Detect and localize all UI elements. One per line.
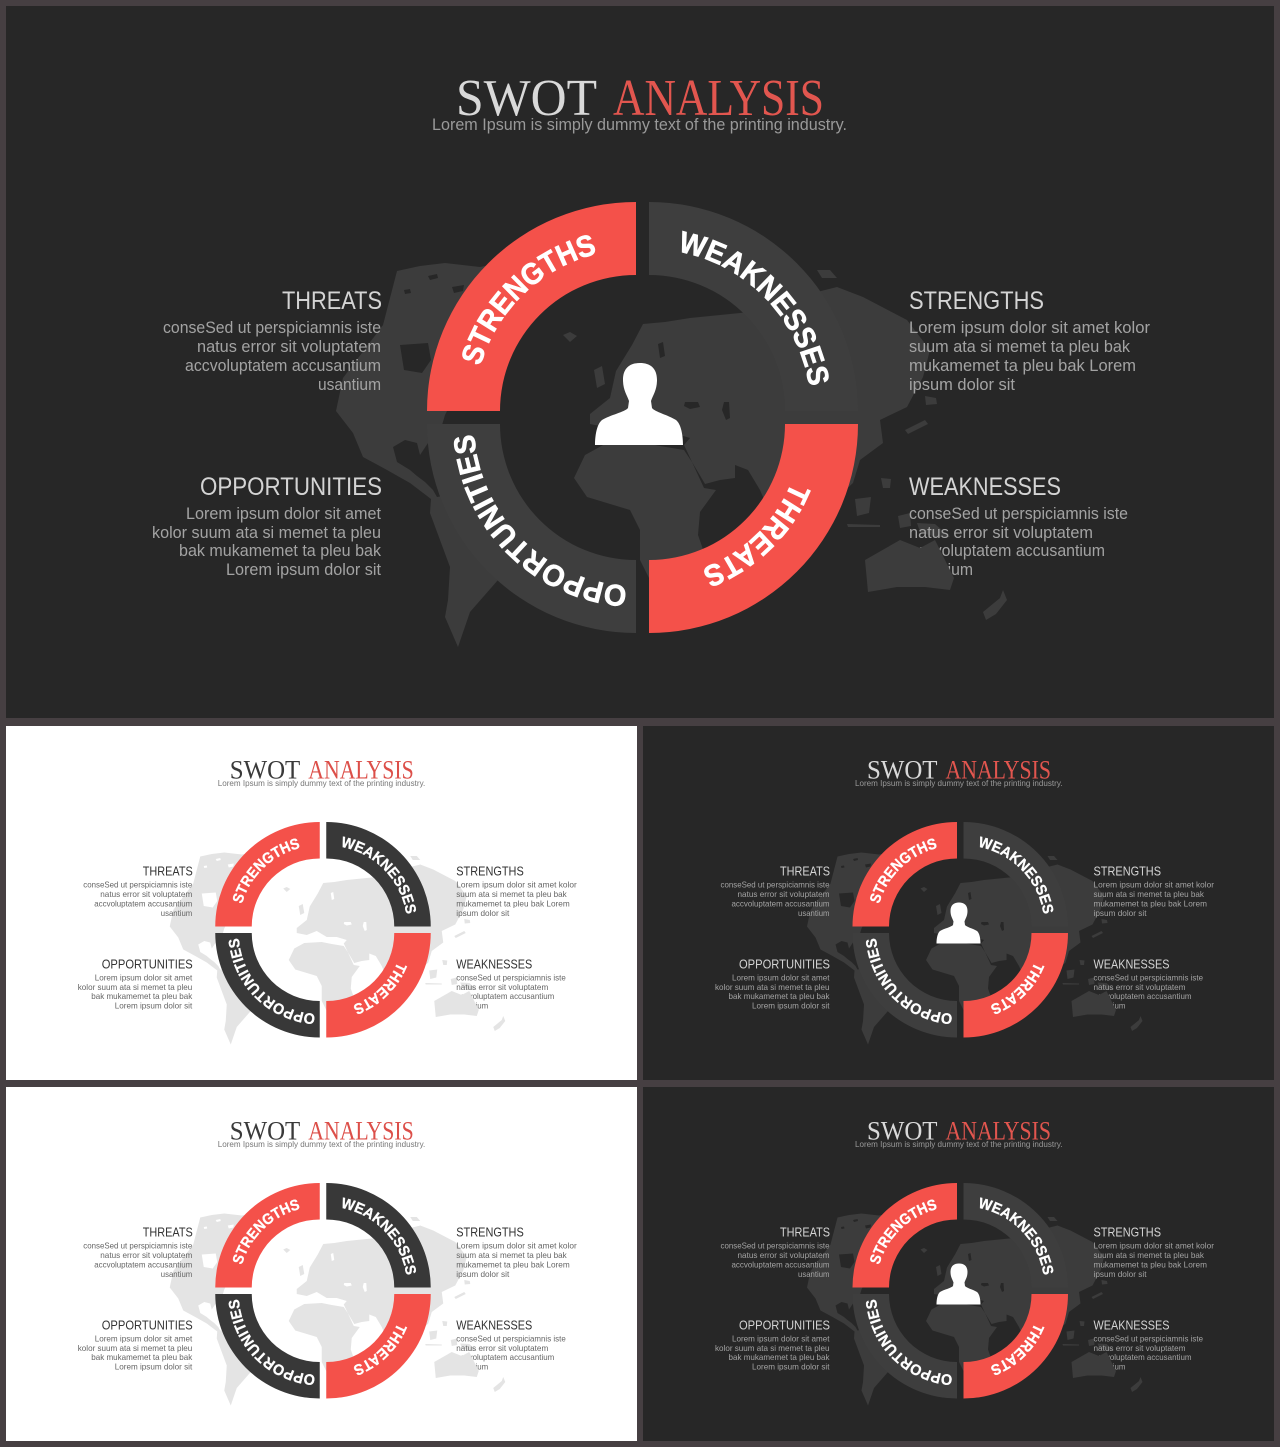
ring segment: opportunities: OPPORTUNITIES [866, 1300, 952, 1385]
text block: strengths: mukamemet ta pleu bak Lorem [1094, 900, 1207, 908]
text block: threats: accvoluptatem accusantium [732, 900, 830, 908]
text block: threats: usantium [798, 1270, 830, 1279]
icon: person [936, 1264, 980, 1304]
slide content [715, 1116, 1214, 1405]
text block: opportunities: kolor suum ata si memet ta pleu [715, 983, 830, 992]
ring segment: threats: THREATS [354, 964, 408, 1014]
subtitle: Lorem Ipsum is simply dummy text of the printing industry. [855, 1139, 1062, 1149]
panel: dark slide bottom [643, 1087, 1274, 1441]
title [456, 70, 824, 127]
text block: strengths: STRENGTHS [909, 287, 1044, 315]
text block: threats: usantium [161, 909, 192, 918]
text block: weaknesses: conseSed ut perspiciamnis iste [1094, 1334, 1203, 1344]
ring segment: weaknesses: WEAKNESSES [682, 230, 829, 385]
text block: threats: natus error sit voluptatem [197, 338, 381, 356]
text block: strengths: Lorem ipsum dolor sit amet kolor [456, 880, 577, 890]
text block: threats: conseSed ut perspiciamnis iste [720, 880, 830, 890]
text block: opportunities: bak mukamemet ta pleu bak [91, 992, 193, 1001]
text block: opportunities: bak mukamemet ta pleu bak [179, 542, 382, 560]
text block: weaknesses: conseSed ut perspiciamnis iste [1094, 974, 1203, 982]
text block: strengths: ipsum dolor sit [456, 909, 510, 918]
panel background [6, 1087, 637, 1441]
panel: light slide top [6, 726, 637, 1080]
text block: strengths: suum ata si memet ta pleu bak [1094, 1251, 1205, 1260]
text block: weaknesses: WEAKNESSES [1094, 1318, 1170, 1332]
subtitle: Lorem Ipsum is simply dummy text of the printing industry. [855, 778, 1062, 788]
text block: weaknesses [456, 958, 566, 1010]
text block: threats: usantium [798, 909, 830, 918]
text block: weaknesses: natus error sit voluptatem [456, 1344, 548, 1353]
text block: strengths: suum ata si memet ta pleu bak [456, 1251, 568, 1260]
text block: weaknesses: usantium [1094, 1362, 1126, 1372]
text block: opportunities: Lorem ipsum dolor sit [752, 1362, 830, 1372]
icon: person [595, 363, 683, 445]
text block: weaknesses: conseSed ut perspiciamnis iste [456, 1334, 566, 1344]
text block: opportunities: Lorem ipsum dolor sit amet [732, 974, 830, 982]
text block: opportunities: Lorem ipsum dolor sit amet [732, 1334, 830, 1344]
text block: opportunities: kolor suum ata si memet ta pleu [78, 983, 193, 992]
text block: strengths: STRENGTHS [456, 1226, 524, 1240]
text block: threats: accvoluptatem accusantium [732, 1260, 830, 1270]
text block: weaknesses [456, 1318, 566, 1372]
text block: opportunities: OPPORTUNITIES [739, 1318, 830, 1332]
text block: strengths [1094, 864, 1214, 918]
subtitle: Lorem Ipsum is simply dummy text of the printing industry. [218, 778, 425, 788]
text block: strengths: suum ata si memet ta pleu bak [456, 890, 568, 899]
text block: strengths: Lorem ipsum dolor sit amet kolor [456, 1242, 577, 1250]
text block: weaknesses [1094, 958, 1203, 1010]
ring segment: weaknesses: WEAKNESSES [342, 1197, 416, 1275]
panel: main dark slide [6, 6, 1274, 718]
text block: opportunities: Lorem ipsum dolor sit [115, 1002, 193, 1010]
panel background [643, 726, 1274, 1080]
text block: opportunities: Lorem ipsum dolor sit [226, 561, 381, 579]
ring segment: threats [326, 933, 431, 1038]
text block: weaknesses: accvoluptatem accusantium [456, 1353, 554, 1362]
text block: opportunities [715, 958, 830, 1010]
ring segment: threats: THREATS [991, 964, 1044, 1014]
text block: opportunities: bak mukamemet ta pleu bak [91, 1353, 193, 1362]
text block: strengths: STRENGTHS [456, 864, 524, 878]
panel background [643, 1087, 1274, 1441]
text block: opportunities: Lorem ipsum dolor sit [115, 1362, 193, 1372]
text block: threats: accvoluptatem accusantium [94, 1260, 192, 1270]
text block: strengths: ipsum dolor sit [1094, 1270, 1147, 1279]
text block: weaknesses [1094, 1318, 1203, 1372]
text block: threats: THREATS [143, 1226, 193, 1240]
ring segment: strengths [852, 1183, 957, 1288]
ring segment: opportunities: OPPORTUNITIES [228, 1300, 314, 1385]
ring segment: strengths [852, 822, 957, 926]
text block: strengths: mukamemet ta pleu bak Lorem [456, 900, 570, 908]
panel: light slide bottom [6, 1087, 637, 1441]
text block: strengths: mukamemet ta pleu bak Lorem [1094, 1260, 1207, 1270]
text block: strengths [1094, 1226, 1214, 1279]
ring segment: weaknesses: WEAKNESSES [342, 836, 416, 914]
text block: opportunities: Lorem ipsum dolor sit amet [95, 1334, 193, 1344]
text block: strengths: Lorem ipsum dolor sit amet kolor [1094, 880, 1214, 890]
ring segment: strengths: STRENGTHS [870, 1200, 937, 1264]
ring segment: strengths [215, 1183, 320, 1288]
text block: opportunities: Lorem ipsum dolor sit amet [95, 974, 193, 982]
text block: strengths [456, 864, 577, 918]
subtitle: Lorem Ipsum is simply dummy text of the printing industry. [432, 115, 847, 134]
ring segment: weaknesses [326, 1183, 431, 1288]
text block: opportunities [152, 473, 382, 579]
subtitle: Lorem Ipsum is simply dummy text of the printing industry. [218, 1139, 425, 1149]
text block: weaknesses: usantium [456, 1002, 488, 1010]
text block: opportunities [715, 1318, 830, 1372]
text block: opportunities: OPPORTUNITIES [102, 958, 193, 972]
ring segment: weaknesses: WEAKNESSES [980, 1197, 1054, 1275]
title: ANALYSIS [946, 1116, 1051, 1146]
world map [170, 1213, 505, 1406]
text block: strengths: ipsum dolor sit [909, 376, 1015, 394]
map: australia [1072, 991, 1116, 1017]
text block: strengths: mukamemet ta pleu bak Lorem [456, 1260, 570, 1270]
ring segment: threats [964, 1294, 1068, 1398]
text block: opportunities: Lorem ipsum dolor sit amet [186, 505, 381, 523]
title: ANALYSIS [613, 70, 824, 127]
title: ANALYSIS [308, 1116, 414, 1146]
ring segment: strengths: STRENGTHS [870, 838, 937, 903]
text block: strengths: ipsum dolor sit [456, 1270, 510, 1279]
text block: threats: conseSed ut perspiciamnis iste [83, 880, 193, 890]
text block: weaknesses: usantium [909, 561, 973, 579]
text block: opportunities: OPPORTUNITIES [102, 1318, 193, 1332]
text block: threats: THREATS [282, 287, 382, 315]
ring segment: opportunities: OPPORTUNITIES [866, 938, 952, 1024]
map: australia [865, 540, 954, 592]
text block: strengths: Lorem ipsum dolor sit amet kolor [1094, 1242, 1214, 1250]
map: australia [1072, 1352, 1116, 1378]
text block: opportunities: bak mukamemet ta pleu bak [728, 992, 830, 1001]
world map [170, 852, 505, 1044]
ring segment: opportunities: OPPORTUNITIES [228, 938, 314, 1024]
text block: strengths: STRENGTHS [1094, 1226, 1161, 1240]
text block: weaknesses: usantium [456, 1362, 488, 1372]
text block: threats: THREATS [143, 864, 193, 878]
text block: threats [83, 1226, 193, 1279]
map: australia [434, 1352, 479, 1378]
panel background [6, 726, 637, 1080]
ring segment: threats [649, 424, 858, 633]
text block: strengths: STRENGTHS [1094, 864, 1161, 878]
text block: threats: usantium [318, 376, 381, 394]
text block: weaknesses: natus error sit voluptatem [1094, 983, 1186, 992]
text block: threats: conseSed ut perspiciamnis iste [163, 319, 381, 337]
ring segment: strengths [427, 202, 636, 411]
title: SWOT [456, 70, 597, 127]
text block: weaknesses: conseSed ut perspiciamnis iste [456, 974, 566, 982]
title: SWOT [230, 1116, 300, 1146]
text block: weaknesses: WEAKNESSES [1094, 958, 1170, 972]
text block: opportunities [78, 1318, 193, 1372]
title: SWOT [230, 756, 300, 784]
text block: opportunities: Lorem ipsum dolor sit [752, 1002, 830, 1010]
text block: threats [720, 864, 830, 918]
text block: weaknesses: accvoluptatem accusantium [1094, 1353, 1192, 1362]
text block: strengths: suum ata si memet ta pleu bak [1094, 890, 1205, 899]
text block: opportunities: kolor suum ata si memet ta pleu [78, 1344, 193, 1353]
ring segment: threats [326, 1294, 431, 1398]
panel background [6, 6, 1274, 718]
text block: weaknesses: accvoluptatem accusantium [909, 542, 1105, 560]
ring segment: weaknesses [326, 822, 431, 926]
text block: threats: conseSed ut perspiciamnis iste [83, 1242, 193, 1250]
text block: opportunities [78, 958, 193, 1010]
ring segment: threats: THREATS [991, 1326, 1044, 1375]
ring segment: opportunities: OPPORTUNITIES [454, 435, 626, 606]
text block: opportunities: bak mukamemet ta pleu bak [728, 1353, 830, 1362]
text block: threats: natus error sit voluptatem [738, 1251, 830, 1260]
text block: weaknesses: natus error sit voluptatem [456, 983, 548, 992]
text block: threats: natus error sit voluptatem [100, 1251, 192, 1260]
slide content [715, 756, 1214, 1044]
panel: dark slide top [643, 726, 1274, 1080]
title [867, 756, 1051, 784]
ring segment: threats [964, 933, 1068, 1038]
text block: threats: natus error sit voluptatem [100, 890, 192, 899]
text block: weaknesses [909, 473, 1128, 579]
text block: strengths: ipsum dolor sit [1094, 909, 1147, 918]
text block: weaknesses: natus error sit voluptatem [909, 524, 1093, 542]
text block: threats: THREATS [780, 864, 830, 878]
title: SWOT [867, 1116, 938, 1146]
slide content [78, 1116, 577, 1406]
text block: threats: conseSed ut perspiciamnis iste [720, 1242, 830, 1250]
text block: strengths [909, 287, 1151, 394]
text block: opportunities: kolor suum ata si memet ta pleu [152, 524, 381, 542]
world map [807, 852, 1142, 1044]
text block: strengths: mukamemet ta pleu bak Lorem [909, 357, 1136, 375]
text block: opportunities: OPPORTUNITIES [739, 958, 830, 972]
text block: threats: THREATS [780, 1226, 830, 1240]
ring segment: strengths: STRENGTHS [462, 235, 596, 364]
title [867, 1116, 1051, 1146]
text block: strengths: suum ata si memet ta pleu bak [909, 338, 1131, 356]
text block: threats [720, 1226, 830, 1279]
text block: threats: natus error sit voluptatem [738, 890, 830, 899]
title: ANALYSIS [308, 756, 414, 784]
text block: threats: accvoluptatem accusantium [185, 357, 381, 375]
text block: weaknesses: WEAKNESSES [456, 1318, 532, 1332]
text block: weaknesses: usantium [1094, 1002, 1126, 1010]
map: australia [434, 991, 479, 1017]
text block: weaknesses: conseSed ut perspiciamnis iste [909, 505, 1128, 523]
text block: weaknesses: WEAKNESSES [456, 958, 532, 972]
text block: strengths: Lorem ipsum dolor sit amet kolor [909, 319, 1151, 337]
ring segment: weaknesses: WEAKNESSES [980, 836, 1054, 914]
text block: threats: usantium [161, 1270, 192, 1279]
text block: opportunities: kolor suum ata si memet ta pleu [715, 1344, 830, 1353]
world map [336, 262, 1007, 647]
title [230, 756, 414, 784]
text block: weaknesses: WEAKNESSES [909, 473, 1061, 501]
ring segment: threats: THREATS [354, 1326, 408, 1375]
title [230, 1116, 414, 1146]
icon: person [936, 902, 980, 944]
title: SWOT [867, 756, 938, 784]
text block: threats [163, 287, 382, 394]
slide content [78, 756, 577, 1044]
world map [807, 1213, 1142, 1406]
title: ANALYSIS [946, 756, 1051, 784]
ring segment: strengths: STRENGTHS [232, 838, 300, 903]
ring segment: strengths [215, 822, 320, 926]
text block: weaknesses: accvoluptatem accusantium [1094, 992, 1192, 1001]
text block: threats: accvoluptatem accusantium [94, 900, 192, 908]
text block: threats [83, 864, 193, 918]
text block: weaknesses: accvoluptatem accusantium [456, 992, 554, 1001]
text block: strengths [456, 1226, 577, 1279]
ring segment: threats: THREATS [704, 487, 811, 586]
ring segment: strengths: STRENGTHS [232, 1200, 300, 1264]
text block: weaknesses: natus error sit voluptatem [1094, 1344, 1186, 1353]
text block: opportunities: OPPORTUNITIES [200, 473, 382, 501]
